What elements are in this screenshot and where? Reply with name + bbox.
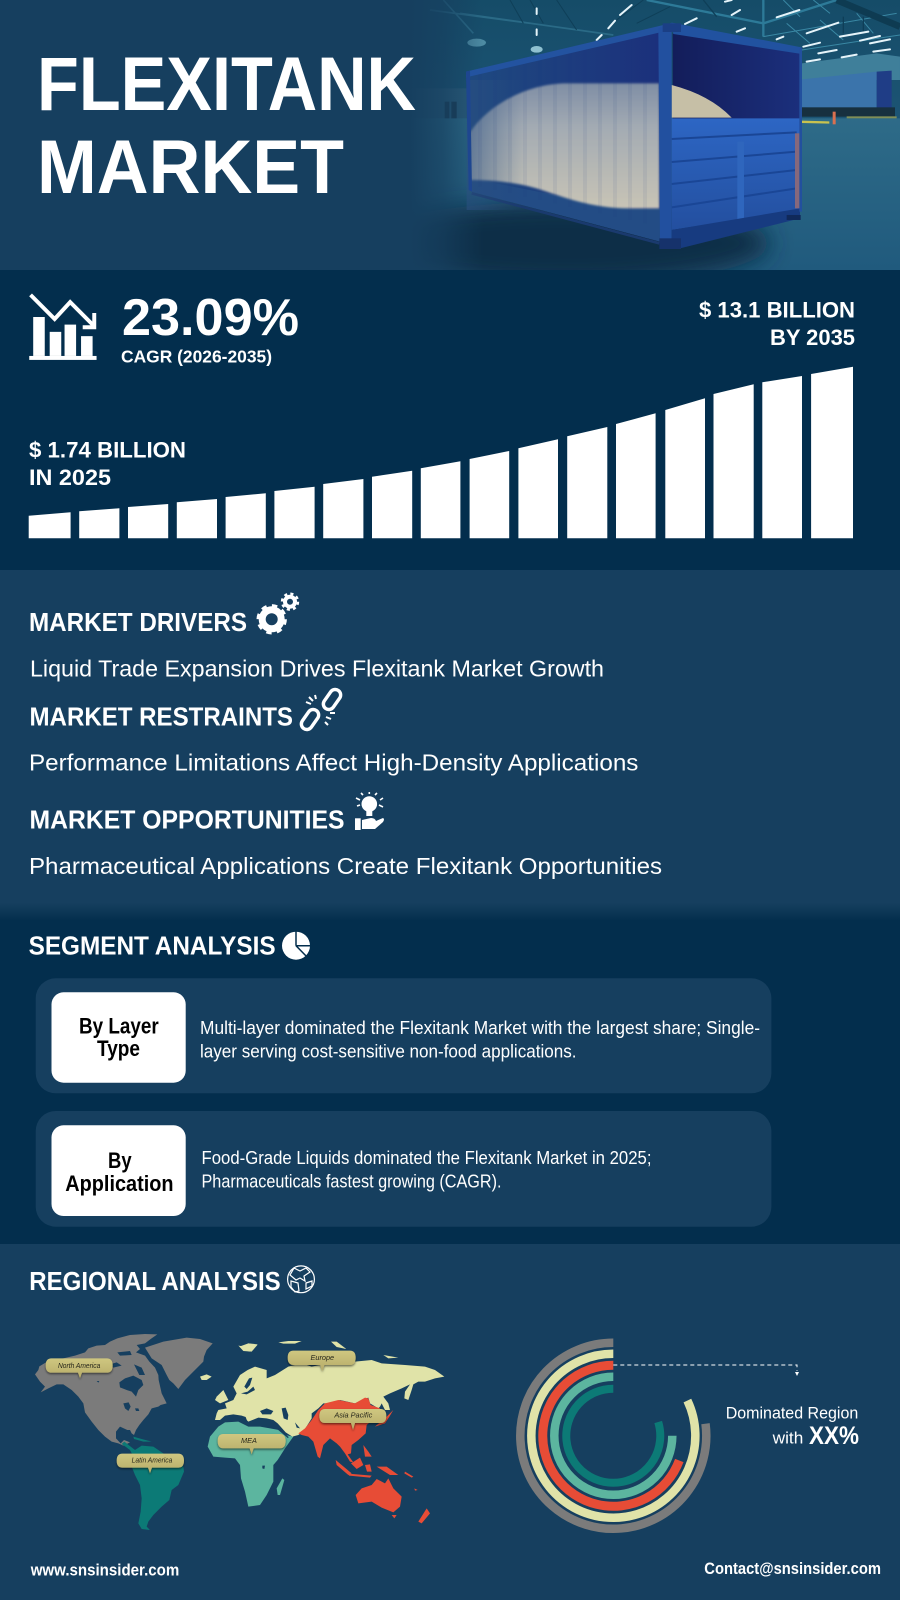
ceiling lights <box>537 0 890 62</box>
CAGR stat: 23.09% <box>122 289 299 347</box>
heading: market restraints: MARKET RESTRAINTS <box>30 704 293 732</box>
callout: dominated region: with <box>772 1429 803 1447</box>
2035 value: BY 2035 <box>770 325 855 350</box>
text: by layer type description <box>200 1018 760 1062</box>
tag: asia pacific <box>319 1409 386 1430</box>
text: by application description: Pharmaceuticals fastest growing (CAGR). <box>202 1171 502 1191</box>
map: eurasia, africa, oceania and labels <box>208 1341 444 1523</box>
flexibag side view <box>469 83 659 208</box>
panel: by layer type <box>36 978 771 1093</box>
heading: market opportunities: MARKET OPPORTUNITIES <box>30 807 344 835</box>
label box: by application <box>52 1125 186 1216</box>
label box: by layer type: By Layer <box>79 1013 159 1038</box>
radial bar chart: regional share <box>520 1343 706 1529</box>
heading: regional analysis: REGIONAL ANALYSIS <box>29 1268 281 1296</box>
container interior <box>673 33 800 120</box>
text: by application description <box>202 1148 652 1191</box>
latin america <box>122 1437 184 1530</box>
warehouse roof beams <box>430 0 900 50</box>
africa <box>208 1422 293 1507</box>
tag: europe: Europe <box>311 1353 334 1362</box>
icon: gears <box>258 594 298 633</box>
icon: growth chart <box>29 295 97 360</box>
text: by layer type description: layer serving cost-sensitive non-food applications. <box>200 1042 576 1062</box>
panel: by application <box>36 1111 771 1227</box>
tag: north america <box>46 1358 113 1378</box>
tag: asia pacific: Asia Pacific <box>333 1411 373 1420</box>
text: opportunities: Pharmaceutical Applications Create Flexitank Opportunities <box>29 853 662 879</box>
title <box>37 42 416 210</box>
map: americas and labels <box>35 1334 257 1530</box>
header photo: flexitank container in warehouse <box>430 0 900 270</box>
tag: mea: MEA <box>241 1436 257 1445</box>
asia pacific <box>298 1398 430 1523</box>
north america <box>35 1334 213 1446</box>
text: by layer type description: Multi-layer dominated the Flexitank Market with the largest share; Single- <box>200 1018 760 1038</box>
icon: globe <box>288 1266 314 1293</box>
heading: market drivers: MARKET DRIVERS <box>29 609 247 637</box>
callout: dominated region: XX% <box>809 1422 859 1450</box>
callout: dominated region <box>726 1404 859 1450</box>
iceland and svalbard <box>200 1343 257 1380</box>
2035 value <box>699 298 855 350</box>
world map <box>35 1334 444 1530</box>
2025 value: IN 2025 <box>29 465 111 490</box>
dashed arrow <box>613 1365 799 1376</box>
title: FLEXITANK <box>37 42 416 127</box>
icon: pie chart <box>282 930 311 960</box>
label box: by layer type: Type <box>97 1036 140 1061</box>
container <box>466 23 802 249</box>
tag: latin america: Latin America <box>132 1456 172 1465</box>
label box: by layer type <box>52 992 186 1083</box>
text: drivers: Liquid Trade Expansion Drives Flexitank Market Growth <box>30 656 604 682</box>
title: MARKET <box>37 125 344 210</box>
text: by application description: Food-Grade Liquids dominated the Flexitank Market in 2025; <box>202 1148 652 1168</box>
front post <box>658 23 672 248</box>
callout: dominated region: Dominated Region <box>726 1404 858 1422</box>
tag: mea <box>218 1434 286 1454</box>
CAGR stat: CAGR (2026-2035) <box>121 346 272 366</box>
label box: by application: Application <box>65 1171 174 1196</box>
tag: latin america <box>117 1454 184 1473</box>
people silhouettes <box>445 102 457 118</box>
2035 value: $ 13.1 BILLION <box>699 298 855 322</box>
icon: broken chain link <box>299 687 343 732</box>
footer: website: www.snsinsider.com <box>30 1560 179 1579</box>
bar chart: market growth <box>29 367 853 538</box>
tag: north america: North America <box>58 1361 100 1370</box>
front boards <box>672 118 800 230</box>
text: restraints: Performance Limitations Affect High-Density Applications <box>29 750 638 776</box>
background truck <box>802 71 897 124</box>
label box: by application: By <box>108 1148 132 1173</box>
icon: lightbulb in hand <box>355 792 384 830</box>
2025 value: $ 1.74 BILLION <box>29 438 186 463</box>
heading: segment analysis: SEGMENT ANALYSIS <box>29 932 276 960</box>
europe and northern asia <box>215 1341 444 1438</box>
tag: europe <box>288 1351 356 1371</box>
2025 value <box>29 438 186 490</box>
